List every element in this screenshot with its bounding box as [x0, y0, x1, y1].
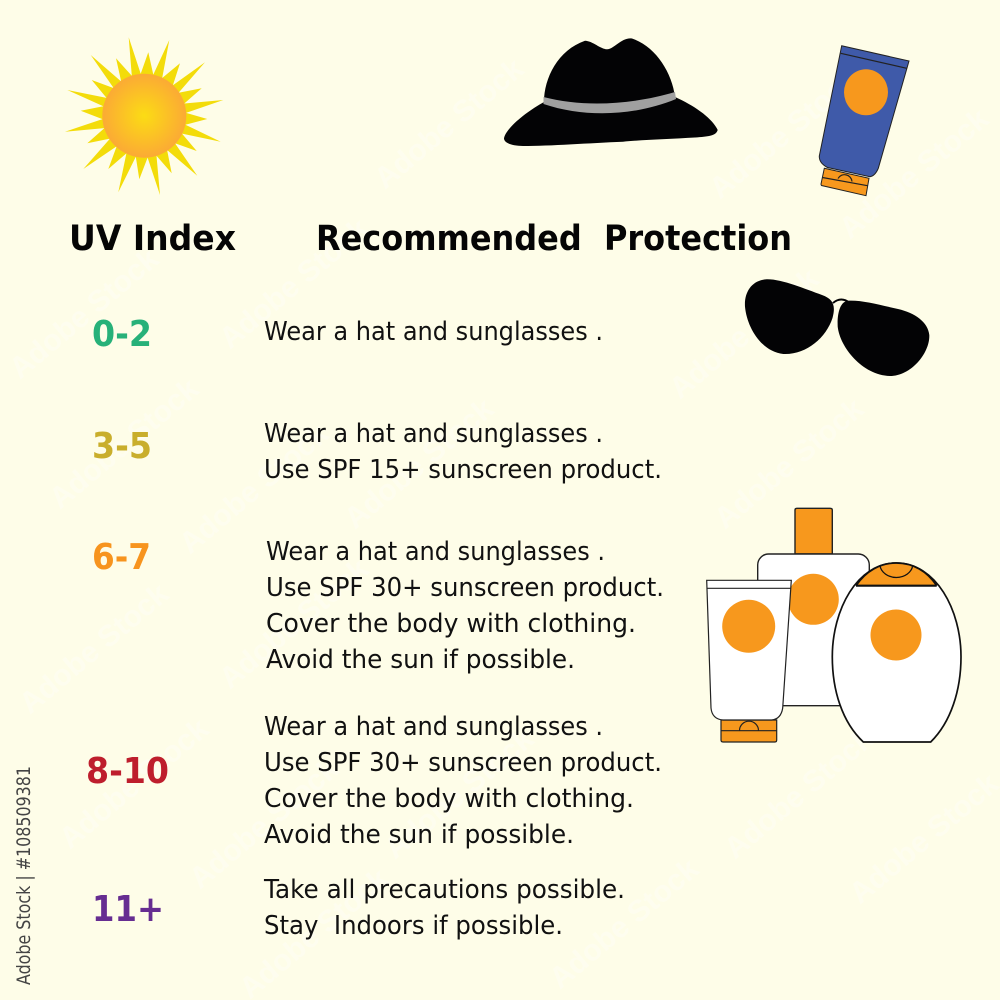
watermark pattern: Adobe Stock: [213, 212, 375, 355]
icon: sunglasses: [745, 279, 929, 376]
watermark pattern: Adobe Stock: [663, 262, 825, 405]
icon: sunscreen bottles group: [707, 508, 961, 742]
advice text: [263, 875, 625, 941]
range label: 0-2: [92, 314, 152, 355]
advice text: Use SPF 15+ sunscreen product.: [264, 455, 662, 485]
advice text: [264, 419, 662, 485]
watermark pattern: Adobe Stock: [703, 62, 865, 205]
watermark pattern: Adobe Stock: [368, 52, 530, 195]
icon: blue sunscreen tube: [819, 46, 909, 196]
advice text: Cover the body with clothing.: [264, 784, 634, 814]
heading: UV Index: UV Index: [69, 219, 236, 259]
advice text: Cover the body with clothing.: [266, 609, 636, 639]
icon: sun: [65, 37, 223, 195]
watermark pattern: Adobe Stock: [183, 752, 345, 895]
watermark pattern: Adobe Stock: [718, 722, 880, 865]
advice text: Wear a hat and sunglasses .: [264, 419, 603, 449]
watermark pattern: Adobe Stock: [173, 417, 335, 560]
advice text: Wear a hat and sunglasses .: [264, 317, 603, 347]
watermark pattern: Adobe Stock: [13, 577, 175, 720]
range label: 11+: [92, 889, 164, 930]
icon: hat: [504, 38, 718, 146]
watermark pattern: Adobe Stock: [3, 242, 165, 385]
stock credit: Adobe Stock | #108509381: [13, 766, 35, 985]
heading: Recommended Protection: Recommended Protection: [316, 219, 792, 259]
advice text: Use SPF 30+ sunscreen product.: [266, 573, 664, 603]
range label: 3-5: [92, 426, 152, 467]
oval bottle: [832, 563, 961, 742]
row: UV 6-7: [92, 537, 664, 675]
advice text: [264, 712, 662, 850]
watermark pattern: Adobe Stock: [43, 372, 205, 515]
advice text: Take all precautions possible.: [263, 875, 625, 905]
advice text: Wear a hat and sunglasses .: [264, 712, 603, 742]
watermark pattern: Adobe Stock: [708, 392, 870, 535]
advice text: Avoid the sun if possible.: [266, 645, 575, 675]
advice text: Wear a hat and sunglasses .: [266, 537, 605, 567]
back bottle: [758, 508, 869, 706]
watermark pattern: Adobe Stock: [338, 392, 500, 535]
row: UV 8-10: [86, 712, 662, 850]
front tube: [707, 580, 791, 742]
row: UV 11+: [92, 875, 625, 941]
advice text: Stay Indoors if possible.: [264, 911, 563, 941]
row: UV 0-2: [92, 314, 603, 355]
watermark pattern: Adobe Stock: [53, 712, 215, 855]
advice text: [266, 537, 664, 675]
range label: 6-7: [92, 537, 151, 578]
watermark pattern: Adobe Stock: [543, 852, 705, 995]
watermark pattern: Adobe Stock: [833, 102, 995, 245]
watermark pattern: Adobe Stock: [378, 722, 540, 865]
advice text: Avoid the sun if possible.: [264, 820, 574, 850]
advice text: Use SPF 30+ sunscreen product.: [264, 748, 662, 778]
range label: 8-10: [86, 751, 169, 792]
hat band: [544, 92, 676, 113]
watermark pattern: Adobe Stock: [213, 552, 375, 695]
row: UV 3-5: [92, 419, 662, 485]
